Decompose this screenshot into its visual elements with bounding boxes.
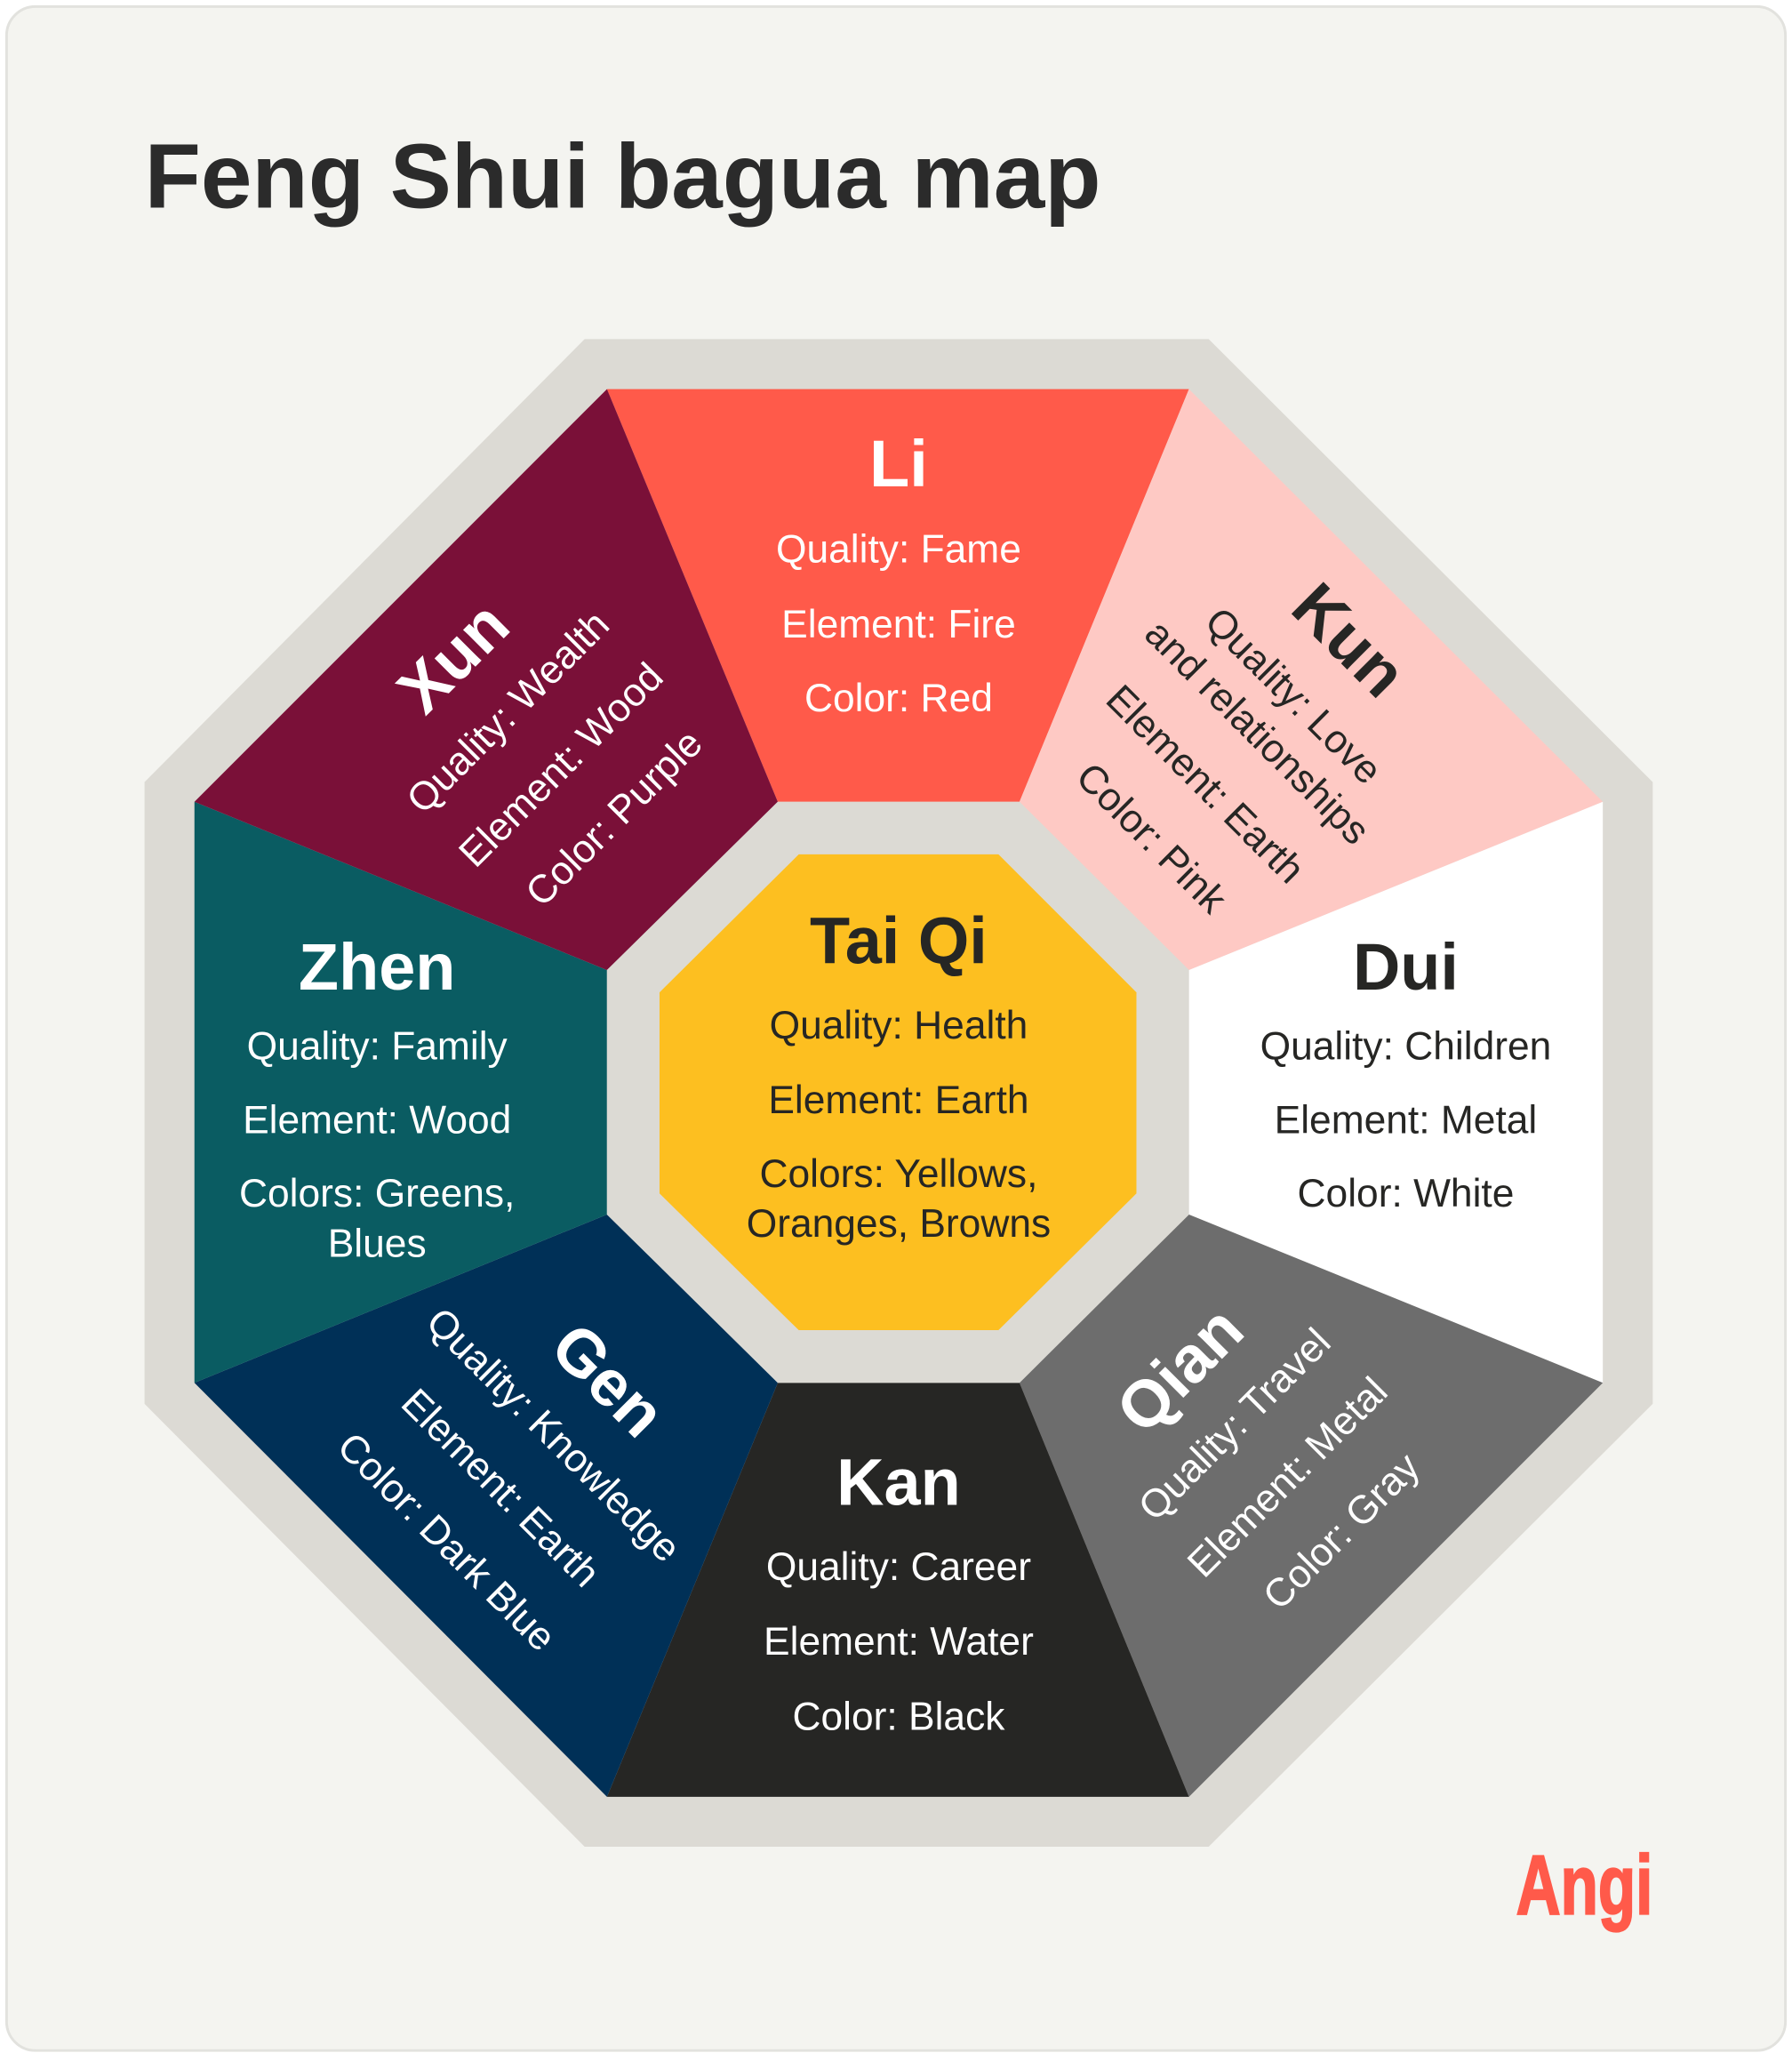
text: Kun: Kun — [1278, 569, 1420, 711]
logo: Angi: Angi — [1516, 1838, 1652, 1932]
text: Gen: Color: Dark Blue — [329, 1424, 564, 1660]
segment: Zhen — [195, 802, 607, 1383]
text: Zhen: Quality: Family — [247, 1025, 508, 1069]
text: Gen: Quality: Knowledge — [418, 1300, 689, 1570]
text: Tai Qi: Colors: Yellows, — [760, 1152, 1037, 1196]
text: Zhen: Element: Wood — [243, 1098, 511, 1142]
text: Kun — [1030, 509, 1481, 959]
segment: Kan — [607, 1383, 1189, 1797]
text: Dui: Color: White — [1298, 1172, 1514, 1215]
segment: Qian — [1020, 1215, 1603, 1797]
text: Kan: Element: Water — [764, 1620, 1034, 1664]
text: Xun: Color: Purple — [517, 721, 711, 915]
title: Feng Shui bagua map — [145, 124, 1101, 228]
segment: Li — [607, 389, 1189, 802]
text: Xun: Xun — [383, 587, 523, 727]
text: Gen — [311, 1234, 755, 1678]
segment: Xun — [195, 389, 778, 970]
text: Kan: Color: Black — [792, 1695, 1005, 1738]
text: Kun: Quality: Love — [1196, 599, 1390, 793]
text: Tai Qi: Tai Qi — [810, 904, 988, 978]
text: Kan: Kan — [836, 1446, 961, 1520]
text: Tai Qi: Oranges, Browns — [747, 1202, 1051, 1246]
text: Kun: Color: Pink — [1068, 755, 1236, 922]
inner gray octagon — [607, 802, 1189, 1383]
text: Gen: Element: Earth — [393, 1381, 608, 1596]
text: Li: Quality: Fame — [776, 528, 1021, 572]
text: Kun: and relationships — [1136, 612, 1378, 853]
text: Dui — [1260, 930, 1551, 1215]
text: Dui: Element: Metal — [1275, 1098, 1537, 1142]
text: Tai Qi: Element: Earth — [768, 1079, 1029, 1122]
text: Xun — [332, 536, 724, 928]
text: Zhen: Colors: Greens, — [239, 1172, 515, 1215]
segment: Dui — [1189, 802, 1603, 1383]
text: Qian: Color: Gray — [1255, 1444, 1428, 1618]
text: Li: Color: Red — [804, 677, 993, 720]
segment: Kun — [1020, 389, 1603, 970]
text: Qian: Quality: Travel — [1131, 1320, 1340, 1529]
text: Tai Qi — [747, 904, 1051, 1246]
text: Zhen — [239, 930, 515, 1265]
text: Kan — [764, 1446, 1034, 1738]
text: Xun: Element: Wood — [451, 654, 672, 876]
text: Zhen: Blues — [328, 1222, 427, 1265]
text: Kan: Quality: Career — [766, 1545, 1031, 1589]
text: Kun: Element: Earth — [1098, 677, 1313, 892]
text: Zhen: Zhen — [299, 930, 455, 1004]
text: Gen: Gen — [537, 1309, 680, 1451]
text: Xun: Quality: Wealth — [398, 603, 618, 822]
bagua octagon — [145, 339, 1652, 1847]
text: Qian: Element: Metal — [1180, 1369, 1396, 1586]
text: Li — [776, 427, 1021, 720]
text: Li: Li — [869, 427, 928, 501]
text: Qian — [1060, 1250, 1450, 1640]
Tai Qi center octagon — [660, 854, 1136, 1330]
outer gray octagon frame — [145, 339, 1652, 1847]
text: Li: Element: Fire — [781, 603, 1016, 646]
text: Dui: Dui — [1353, 930, 1459, 1004]
text: Qian: Qian — [1102, 1292, 1257, 1448]
text: Dui: Quality: Children — [1260, 1025, 1551, 1069]
text: Tai Qi: Quality: Health — [770, 1004, 1028, 1047]
segment: Gen — [195, 1215, 778, 1797]
